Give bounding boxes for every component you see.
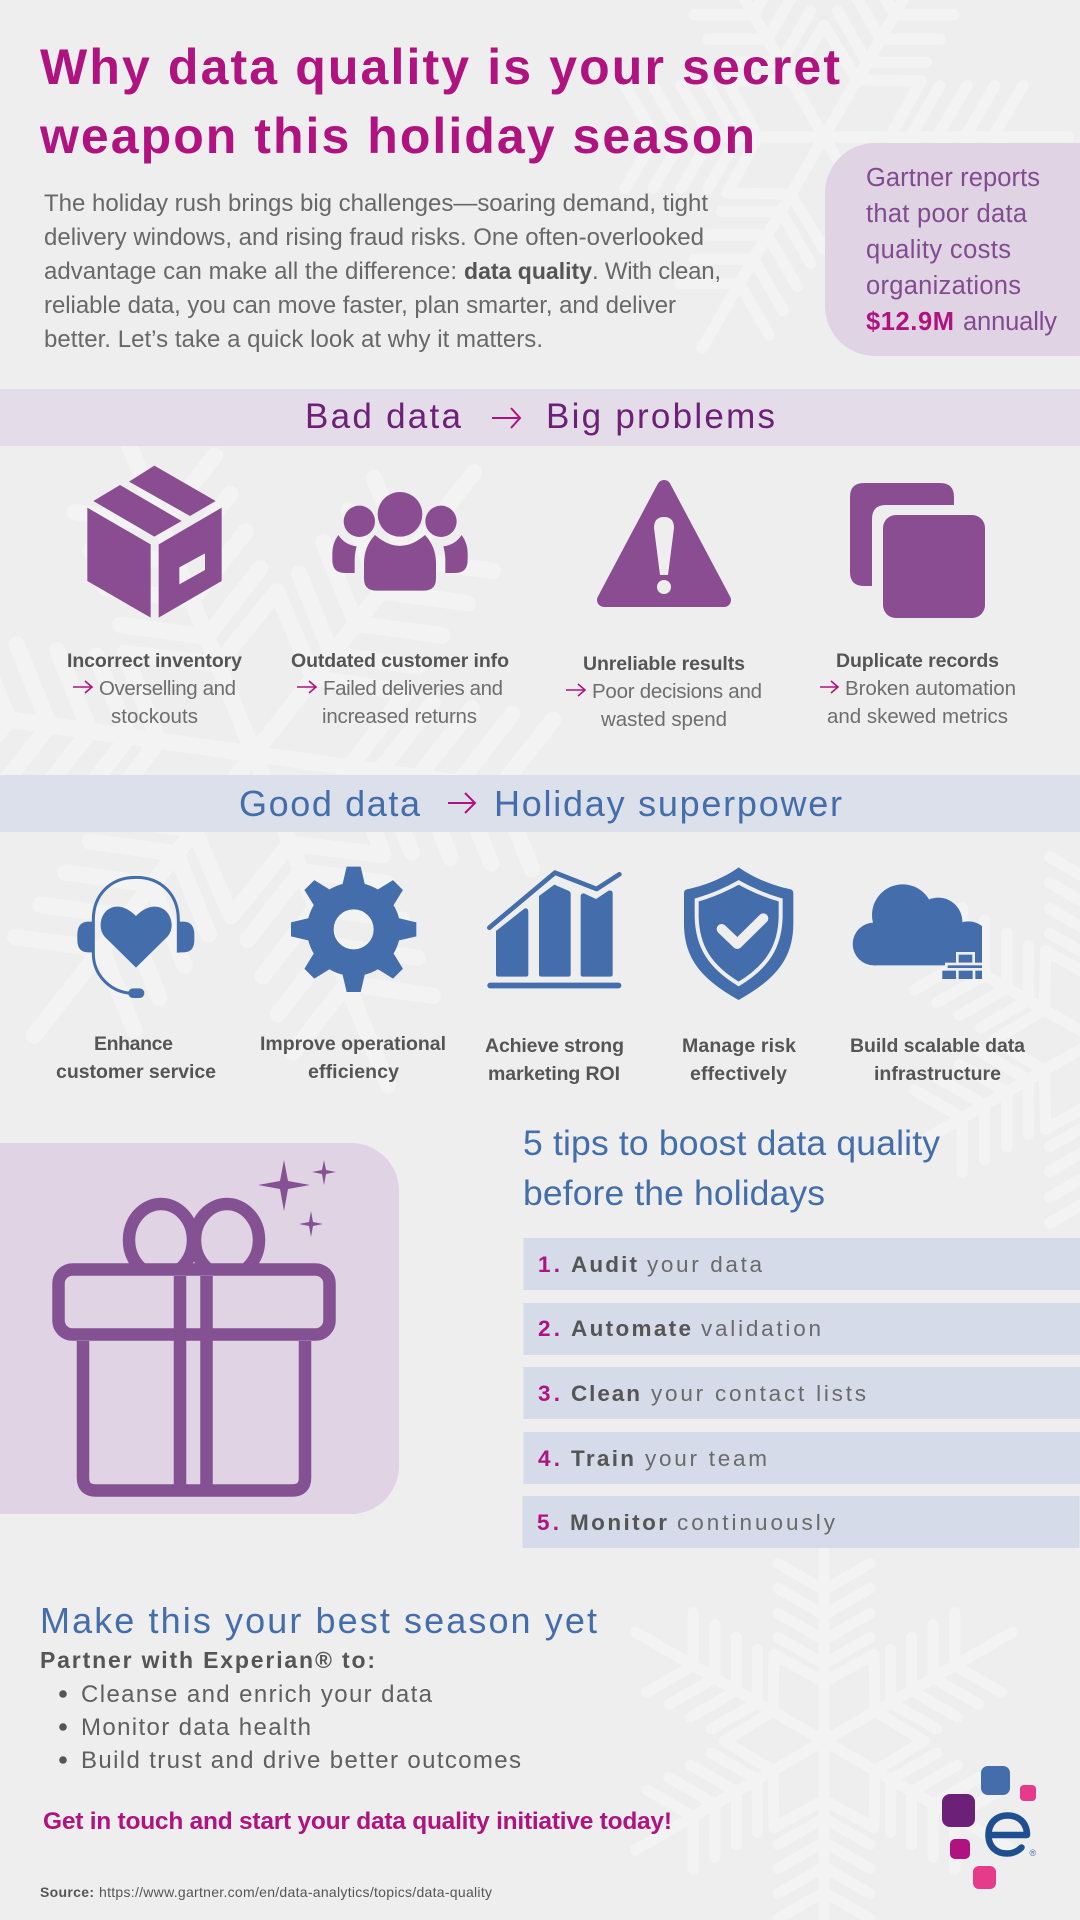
text: manage risk effectively: Manage risk	[682, 1035, 796, 1057]
heading band: bad data	[0, 389, 1080, 446]
text: unreliable results: Unreliable results	[583, 653, 745, 675]
text: duplicate records	[820, 650, 1016, 728]
text: improve operational efficiency	[260, 1033, 446, 1083]
title: weapon this holiday season	[39, 108, 755, 164]
icon: sparkles	[258, 1160, 336, 1237]
heading: five tips	[523, 1123, 940, 1213]
text: outdated customer info: increased returns	[322, 705, 477, 728]
bullet list: Cleanse and enrich your data	[81, 1681, 433, 1708]
panel: gift illustration	[0, 1143, 399, 1514]
intro text block: advantage can make all the difference:	[44, 258, 457, 285]
icon: warning triangle	[604, 487, 724, 600]
source line: Source:	[40, 1884, 94, 1900]
icon: shield with check	[684, 867, 793, 1000]
text: unreliable results: Poor decisions and	[592, 680, 762, 703]
heading: best season: Make this your best season yet	[40, 1600, 597, 1641]
heading band: good data	[0, 775, 1080, 832]
intro text block: . With clean,	[592, 258, 721, 285]
heading band: good data: Good data	[239, 783, 421, 824]
tip 2: 2.	[538, 1316, 560, 1341]
callout: Gartner statistic: quality costs	[866, 236, 1011, 264]
text: incorrect inventory	[67, 650, 242, 728]
tip 2	[524, 1303, 1080, 1355]
text: duplicate records: Duplicate records	[836, 650, 999, 672]
tip 5: 5.	[537, 1510, 559, 1535]
intro text block: The holiday rush brings big challenges—soaring demand, tight	[44, 190, 708, 217]
tip 1: your data	[647, 1252, 762, 1277]
tip 3	[524, 1367, 1080, 1419]
tip 4: 4.	[538, 1446, 560, 1471]
callout: Gartner statistic: Gartner reports	[866, 164, 1040, 192]
list: five tips	[522, 1238, 1080, 1548]
icon: gift box	[58, 1204, 330, 1490]
tip 3: 3.	[538, 1381, 560, 1406]
title: Why data quality is your secret	[40, 39, 840, 95]
callout: Gartner statistic	[825, 143, 1080, 356]
closing section	[40, 1600, 672, 1900]
heading band: good data: Holiday superpower	[494, 783, 842, 824]
text: build scalable data infrastructure: infrastructure	[874, 1063, 1001, 1085]
intro text block: reliable data, you can move faster, plan smarter, and deliver	[44, 292, 676, 319]
text: incorrect inventory: Overselling and	[99, 677, 236, 700]
title	[39, 39, 840, 164]
intro text block	[44, 190, 721, 353]
tip 2: validation	[701, 1316, 821, 1341]
text: duplicate records: and skewed metrics	[827, 705, 1008, 728]
text: manage risk effectively	[682, 1035, 796, 1085]
text: build scalable data infrastructure	[850, 1035, 1025, 1085]
intro text block: data quality	[464, 258, 592, 284]
heading band: bad data: Bad data	[305, 397, 462, 436]
tip 3: Clean	[571, 1381, 640, 1406]
heading band: bad data: Big problems	[546, 397, 775, 436]
callout: Gartner statistic: $12.9M	[866, 308, 954, 336]
tip 5	[522, 1496, 1080, 1548]
intro text block: delivery windows, and rising fraud risks. One often-overlooked	[44, 224, 704, 251]
text: unreliable results	[566, 653, 762, 731]
text: outdated customer info: Outdated customer info	[291, 650, 509, 672]
text: improve operational efficiency: efficiency	[308, 1061, 399, 1083]
icon: group of people	[332, 492, 468, 591]
text: unreliable results: wasted spend	[600, 708, 727, 731]
tip 2: Automate	[571, 1316, 691, 1341]
bullet list: Build trust and drive better outcomes	[81, 1747, 521, 1774]
icon: bar chart with trend line	[487, 873, 621, 988]
text: duplicate records: Broken automation	[845, 677, 1016, 700]
bullet list: Monitor data health	[81, 1714, 311, 1741]
tip 4: Train	[571, 1446, 634, 1471]
tip 5: Monitor	[570, 1510, 667, 1535]
callout: Gartner statistic: that poor data	[866, 200, 1028, 228]
tip 1: Audit	[571, 1252, 638, 1277]
text: build scalable data infrastructure: Build scalable data	[850, 1035, 1025, 1057]
logo: Experian: ®	[1030, 1848, 1036, 1858]
tip 4	[524, 1432, 1080, 1484]
text: achieve strong marketing ROI: Achieve strong	[485, 1035, 624, 1057]
icon: package box	[87, 466, 222, 618]
text: incorrect inventory: Incorrect inventory	[67, 650, 242, 672]
text: enhance customer service: Enhance	[94, 1033, 173, 1055]
text: enhance customer service	[56, 1033, 216, 1083]
tip 1: 1.	[538, 1252, 560, 1277]
heading: five tips: before the holidays	[523, 1173, 825, 1213]
icon: duplicate records	[850, 483, 985, 618]
text: achieve strong marketing ROI	[485, 1035, 624, 1085]
tip 1	[524, 1238, 1080, 1290]
logo: Experian	[942, 1766, 1036, 1889]
callout: Gartner statistic: annually	[963, 308, 1057, 336]
tip 4: your team	[645, 1446, 767, 1471]
text: enhance customer service: customer service	[56, 1061, 216, 1083]
text: incorrect inventory: stockouts	[111, 705, 198, 728]
callout: Gartner statistic: organizations	[866, 272, 1021, 300]
tip 5: continuously	[677, 1510, 836, 1535]
text: outdated customer info	[291, 650, 509, 728]
source line: https://www.gartner.com/en/data-analytics/topics/data-quality	[99, 1884, 492, 1900]
tip 3: your contact lists	[651, 1381, 866, 1406]
call to action: Get in touch and start your data quality initiative today!	[43, 1808, 672, 1835]
icon: gear	[291, 867, 416, 992]
text: improve operational efficiency: Improve operational	[260, 1033, 446, 1055]
icon: headset with heart	[77, 877, 194, 998]
intro text block: better. Let’s take a quick look at why it matters.	[44, 326, 543, 353]
text: outdated customer info: Failed deliveries and	[323, 677, 503, 700]
text: manage risk effectively: effectively	[690, 1063, 787, 1085]
heading: five tips: 5 tips to boost data quality	[523, 1123, 940, 1163]
text: achieve strong marketing ROI: marketing ROI	[488, 1063, 620, 1085]
subheading: partner with Experian: Partner with Experian® to:	[40, 1647, 375, 1673]
icon: cloud with network	[853, 884, 990, 979]
panel: good data benefits	[56, 867, 1025, 1085]
panel: bad data problems	[67, 466, 1016, 731]
bullet list	[59, 1681, 521, 1774]
